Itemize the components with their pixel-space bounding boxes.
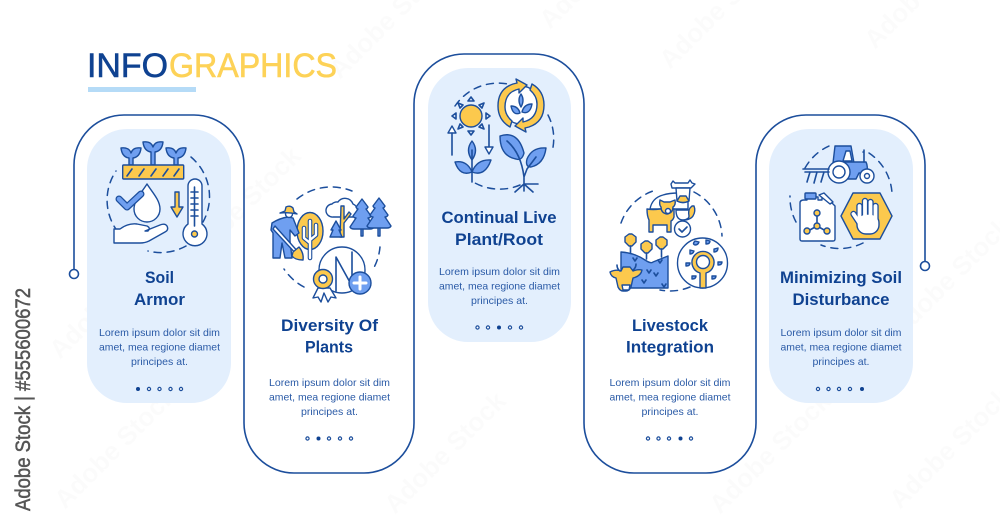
pagination dots: step 2 — [306, 436, 353, 440]
heading: diversity of plants: Diversity Of — [281, 316, 378, 335]
pagination dots: step 3 — [476, 326, 523, 330]
heading: minimizing soil disturbance — [780, 268, 902, 309]
watermark pattern: Adobe Stock — [48, 380, 182, 514]
heading: soil armor: Soil — [145, 268, 174, 287]
heading: livestock integration: Integration — [626, 338, 714, 356]
title underline — [88, 87, 196, 92]
heading: minimizing soil disturbance: Minimizing Soil — [780, 268, 902, 287]
text block: soil armor — [99, 327, 220, 368]
card: soil armor background — [87, 129, 231, 403]
heading: continual live plant/root: Continual Live — [442, 208, 556, 227]
heading: continual live plant/root — [442, 208, 556, 249]
icon: continual live plant and root — [448, 79, 554, 192]
heading: minimizing soil disturbance: Disturbance — [792, 290, 890, 309]
connecting outline — [70, 54, 930, 473]
watermark pattern: Adobe Stock — [43, 230, 177, 364]
heading: diversity of plants: Plants — [305, 338, 353, 356]
text block: soil armor: amet, mea regione diamet — [99, 342, 220, 354]
heading: livestock integration: Livestock — [632, 316, 709, 335]
text block: continual live plant/root: Lorem ipsum dolor sit dim — [439, 266, 560, 278]
text block: continual live plant/root — [439, 266, 560, 307]
text block: minimizing soil disturbance — [780, 327, 902, 368]
pagination dots: step 5 — [816, 387, 864, 391]
card: continual live plant background — [428, 68, 571, 342]
pagination dots: step 4 — [646, 436, 693, 440]
text block: diversity of plants: Lorem ipsum dolor sit dim — [269, 377, 390, 389]
text block: livestock integration: Lorem ipsum dolor sit dim — [610, 377, 731, 389]
text block: continual live plant/root: amet, mea regione diamet — [439, 280, 560, 292]
icon: livestock integration — [610, 180, 728, 291]
card: minimizing soil disturbance background — [769, 129, 913, 403]
title — [87, 47, 337, 85]
icon: soil armor — [107, 142, 210, 253]
text block: diversity of plants: amet, mea regione diamet — [269, 392, 390, 404]
text block: diversity of plants: principes at. — [301, 406, 358, 418]
watermark pattern: Adobe Stock — [173, 140, 307, 274]
pagination dots: step 1 — [136, 387, 183, 391]
watermark pattern: Adobe Stock — [703, 385, 837, 519]
heading: soil armor — [134, 268, 185, 309]
text block: livestock integration: amet, mea regione diamet — [610, 392, 731, 404]
text block: diversity of plants — [269, 377, 390, 418]
heading: continual live plant/root: Plant/Root — [455, 230, 543, 249]
text block: livestock integration: principes at. — [642, 406, 698, 418]
side credit text: Adobe Stock | #555600672 — [12, 288, 35, 511]
title: GRAPHICS — [169, 47, 337, 85]
heading: soil armor: Armor — [134, 290, 185, 309]
heading: livestock integration — [626, 316, 714, 356]
heading: diversity of plants — [281, 316, 378, 356]
text block: livestock integration — [610, 377, 731, 418]
text block: soil armor: Lorem ipsum dolor sit dim — [99, 327, 220, 339]
text block: continual live plant/root: principes at. — [471, 295, 528, 307]
text block: soil armor: principes at. — [131, 356, 188, 368]
text block: minimizing soil disturbance: amet, mea regione diamet — [780, 342, 902, 354]
text block: minimizing soil disturbance: Lorem ipsum dolor sit dim — [780, 327, 902, 339]
icon: minimizing soil disturbance — [790, 146, 892, 248]
watermark pattern: Adobe Stock — [378, 385, 512, 519]
icon: diversity of plants — [271, 187, 391, 302]
text block: minimizing soil disturbance: principes at. — [812, 356, 870, 368]
title: INFO — [87, 47, 168, 85]
